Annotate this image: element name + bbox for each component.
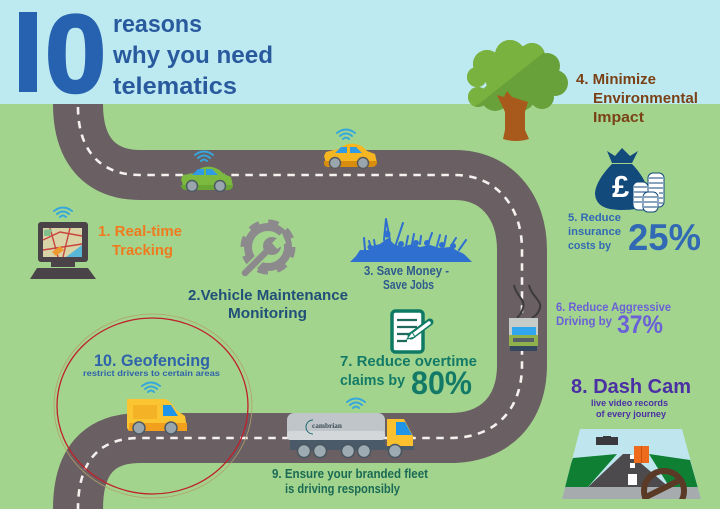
text: 6. Reduce Aggressive Driving by 37%: 37% [617, 311, 663, 339]
text: 5. Reduce insurance costs by 25%: costs by [568, 240, 612, 252]
title: 10 reasons why you need telematics: reasons [113, 11, 202, 38]
text: 5. Reduce insurance costs by 25%: 5. Reduce [568, 212, 621, 224]
title: 10 reasons why you need telematics: why you need [112, 42, 273, 69]
icon: cheering crowd [350, 219, 472, 262]
heading: 1. Real-time Tracking: 1. Real-time [98, 224, 182, 240]
icon: tree [467, 40, 568, 141]
text: 7. Reduce overtime claims by 80%: 7. Reduce overtime [340, 354, 477, 370]
heading: 2. Vehicle Maintenance Monitoring: Monitoring [228, 305, 307, 322]
heading: 8. Dash Cam: 8. Dash Cam [571, 376, 691, 398]
icon: wifi on van [142, 382, 160, 392]
heading: 4. Minimize Environmental Impact [576, 72, 698, 126]
heading: 1. Real-time Tracking [98, 224, 182, 259]
heading: 4. Minimize Environmental Impact: 4. Minimize [576, 72, 656, 88]
text: 9. Ensure your branded fleet is driving responsibly: is driving responsibly [285, 482, 400, 496]
heading: 4. Minimize Environmental Impact: Impact [593, 110, 644, 126]
icon: gear and wrench [244, 223, 292, 273]
heading: 8. Dash Cam [571, 376, 691, 419]
icon: dash cam view [562, 429, 701, 499]
icon: money bag with coins [595, 148, 664, 212]
yellow van [127, 399, 187, 434]
heading: 4. Minimize Environmental Impact: Environmental [593, 91, 698, 107]
heading: 8. Dash Cam: live video records [591, 398, 668, 408]
front view truck with exhaust trails [509, 285, 540, 351]
heading: 2. Vehicle Maintenance Monitoring [188, 287, 348, 322]
heading: 10. Geofencing: 10. Geofencing [94, 351, 210, 370]
icon: wifi on yellow car [337, 130, 355, 139]
text: 5. Reduce insurance costs by 25% [568, 212, 701, 258]
text: 6. Reduce Aggressive Driving by 37% [556, 302, 671, 339]
icon: wifi on monitor [54, 208, 72, 217]
icon: document and pen [392, 311, 430, 352]
text: 6. Reduce Aggressive Driving by 37%: 6. Reduce Aggressive [556, 302, 671, 314]
icon: monitor with map [30, 222, 96, 279]
tanker truck [287, 413, 414, 458]
heading: 8. Dash Cam: of every journey [596, 409, 666, 419]
text: 7. Reduce overtime claims by 80% [340, 354, 477, 401]
winding road [78, 104, 522, 509]
icon: wifi on green car [195, 152, 213, 161]
green car [181, 167, 233, 192]
heading: 1. Real-time Tracking: Tracking [112, 243, 173, 259]
icon: wifi on tanker [347, 398, 365, 408]
text: 9. Ensure your branded fleet is driving responsibly [272, 467, 429, 496]
text: 3. Save Money - Save Jobs: Save Jobs [383, 278, 434, 292]
heading: 10. Geofencing: restrict drivers to certain areas [83, 368, 220, 378]
sky background [0, 0, 720, 104]
title: 10 reasons why you need telematics: telematics [113, 73, 237, 100]
heading: 2. Vehicle Maintenance Monitoring: 2.Vehicle Maintenance [188, 287, 348, 304]
heading: 10. Geofencing [83, 351, 220, 378]
tanker truck: cambrian [312, 421, 343, 430]
text: 3. Save Money - Save Jobs [364, 264, 449, 292]
yellow car [324, 144, 377, 168]
text: 7. Reduce overtime claims by 80%: claims by [340, 373, 405, 389]
geofence circle [54, 314, 252, 498]
text: 5. Reduce insurance costs by 25%: 25% [628, 217, 701, 258]
text: 7. Reduce overtime claims by 80%: 80% [411, 365, 472, 401]
text: 5. Reduce insurance costs by 25%: insurance [568, 226, 621, 238]
grass background [0, 104, 720, 509]
text: 9. Ensure your branded fleet is driving responsibly: 9. Ensure your branded fleet [272, 467, 429, 481]
text: 3. Save Money - Save Jobs: 3. Save Money - [364, 264, 449, 278]
title: 10 reasons why you need telematics [19, 12, 272, 94]
icon: money bag with coins: £ [612, 169, 629, 204]
text: 6. Reduce Aggressive Driving by 37%: Driving by [556, 316, 613, 328]
